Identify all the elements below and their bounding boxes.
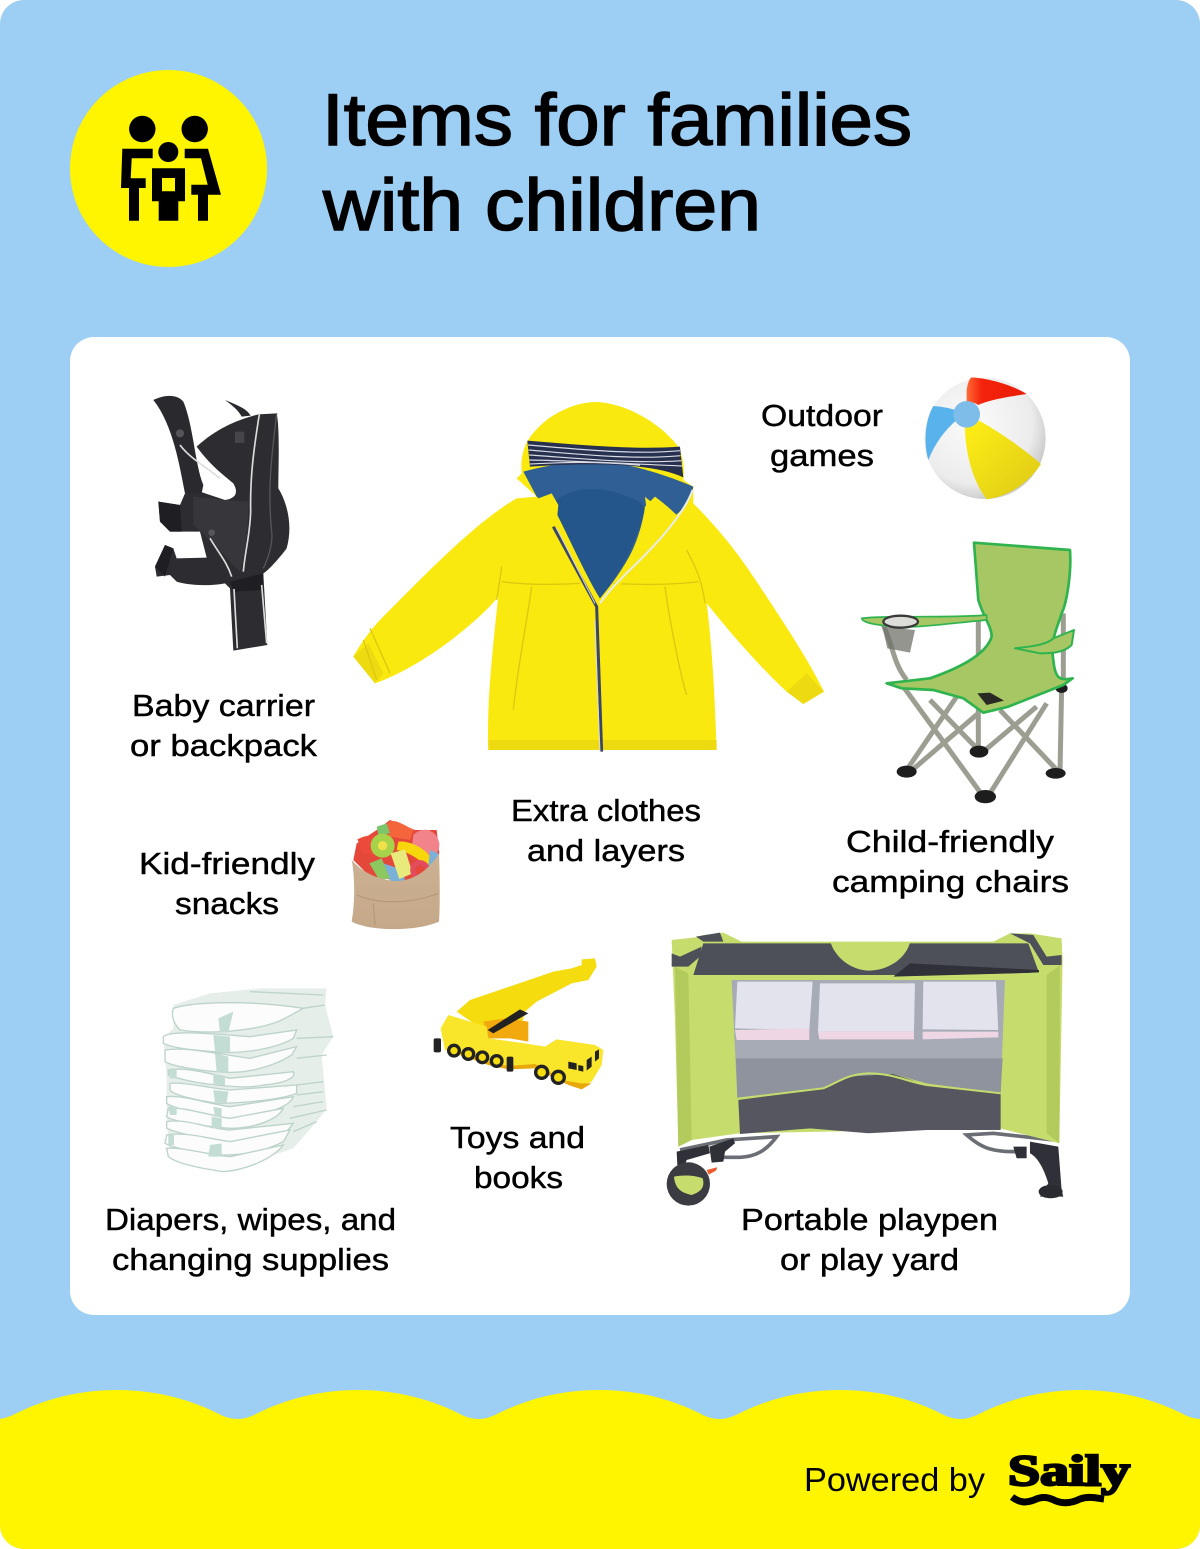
label: extra clothes: and layers <box>527 833 685 868</box>
item image: baby carrier <box>153 396 289 651</box>
label: outdoor games: Outdoor <box>761 398 883 433</box>
label: outdoor games: games <box>770 438 874 473</box>
label: toys and books: Toys and <box>450 1120 585 1155</box>
label: baby carrier: Baby carrier <box>132 688 315 723</box>
item image: portable playpen <box>667 933 1063 1206</box>
item image: camping chair <box>862 543 1074 803</box>
item image: yellow jacket <box>353 402 824 752</box>
label: diapers <box>105 1202 396 1277</box>
label: extra clothes: Extra clothes <box>511 793 701 828</box>
item image: toy crane <box>434 958 603 1089</box>
logo: Saily <box>1008 1448 1131 1503</box>
label: baby carrier: or backpack <box>130 728 318 763</box>
label: toys and books <box>450 1120 585 1195</box>
label: diapers: Diapers, wipes, and <box>105 1202 396 1237</box>
title: Items for families <box>322 80 912 161</box>
title: with children <box>322 165 761 246</box>
label: camping chairs: camping chairs <box>832 864 1069 899</box>
label: playpen: or play yard <box>780 1242 959 1277</box>
item image: bag of candy <box>352 820 440 929</box>
label: camping chairs: Child-friendly <box>846 824 1055 859</box>
footer wave band <box>0 1390 1200 1549</box>
label: diapers: changing supplies <box>112 1242 389 1277</box>
label: baby carrier <box>130 688 318 763</box>
icon: family in yellow circle <box>70 70 267 267</box>
label: camping chairs <box>832 824 1069 899</box>
label: toys and books: books <box>474 1160 563 1195</box>
label: extra clothes <box>511 793 701 868</box>
label: snacks: snacks <box>175 886 279 921</box>
label: snacks <box>139 846 316 921</box>
label: snacks: Kid-friendly <box>139 846 316 881</box>
label: outdoor games <box>761 398 883 473</box>
panel: white items card <box>70 337 1130 1315</box>
logo: Saily: Saily <box>1008 1448 1131 1495</box>
footer: powered by text: Powered by <box>804 1461 986 1498</box>
label: playpen <box>741 1202 998 1277</box>
item image: stack of diapers <box>163 988 333 1172</box>
item image: beach ball <box>924 377 1046 499</box>
label: playpen: Portable playpen <box>741 1202 998 1237</box>
title <box>322 80 912 246</box>
